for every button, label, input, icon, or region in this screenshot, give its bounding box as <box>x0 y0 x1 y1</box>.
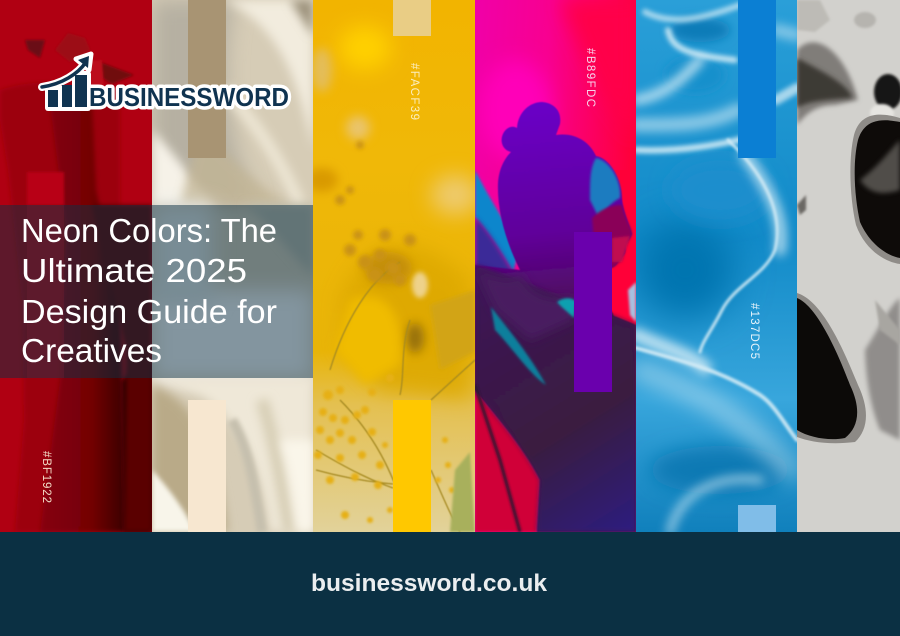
hex label: FACF39: #FACF39 <box>408 63 420 120</box>
panel: monochrome ink photo column <box>797 0 900 532</box>
color swatch: violet <box>574 232 612 392</box>
hex label: 137DC5: #137DC5 <box>748 303 760 359</box>
icon: portrait silhouette with profile <box>475 102 636 532</box>
red cloth lower left <box>475 390 540 532</box>
title: Creatives <box>21 332 162 369</box>
title overlay panel <box>0 205 313 378</box>
color swatch: pale gold <box>393 0 431 36</box>
color swatch: tan <box>188 0 226 158</box>
brightened cloth beneath the overlay <box>152 290 313 380</box>
logo wordmark: BUSINESSWORD <box>89 82 289 112</box>
color swatch: cream <box>188 400 226 532</box>
footer url: businessword.co.uk <box>311 570 548 597</box>
blue cloth band <box>475 170 520 272</box>
color swatch: blue <box>738 0 776 158</box>
title: Design Guide for <box>21 293 277 330</box>
title: Ultimate 2025 <box>21 252 247 289</box>
icon: rising bars and arrow <box>42 54 91 111</box>
color swatch: yellow <box>393 400 431 532</box>
footer band <box>0 532 900 636</box>
panel: yellow mimosa photo column <box>306 0 479 532</box>
logo: BusinessWord <box>42 54 289 112</box>
hex label: BF1922: #BF1922 <box>40 451 52 503</box>
title: Neon Colors: The <box>21 212 277 249</box>
hex label: B89FDC: #B89FDC <box>584 48 596 107</box>
panel: red shoe photo column <box>0 0 152 532</box>
panel: magenta portrait photo column <box>475 0 636 532</box>
color swatch: light blue <box>738 505 776 532</box>
title <box>21 212 277 369</box>
panel: blue water photo column <box>635 0 797 532</box>
panel: cream silk photo column <box>152 0 313 532</box>
